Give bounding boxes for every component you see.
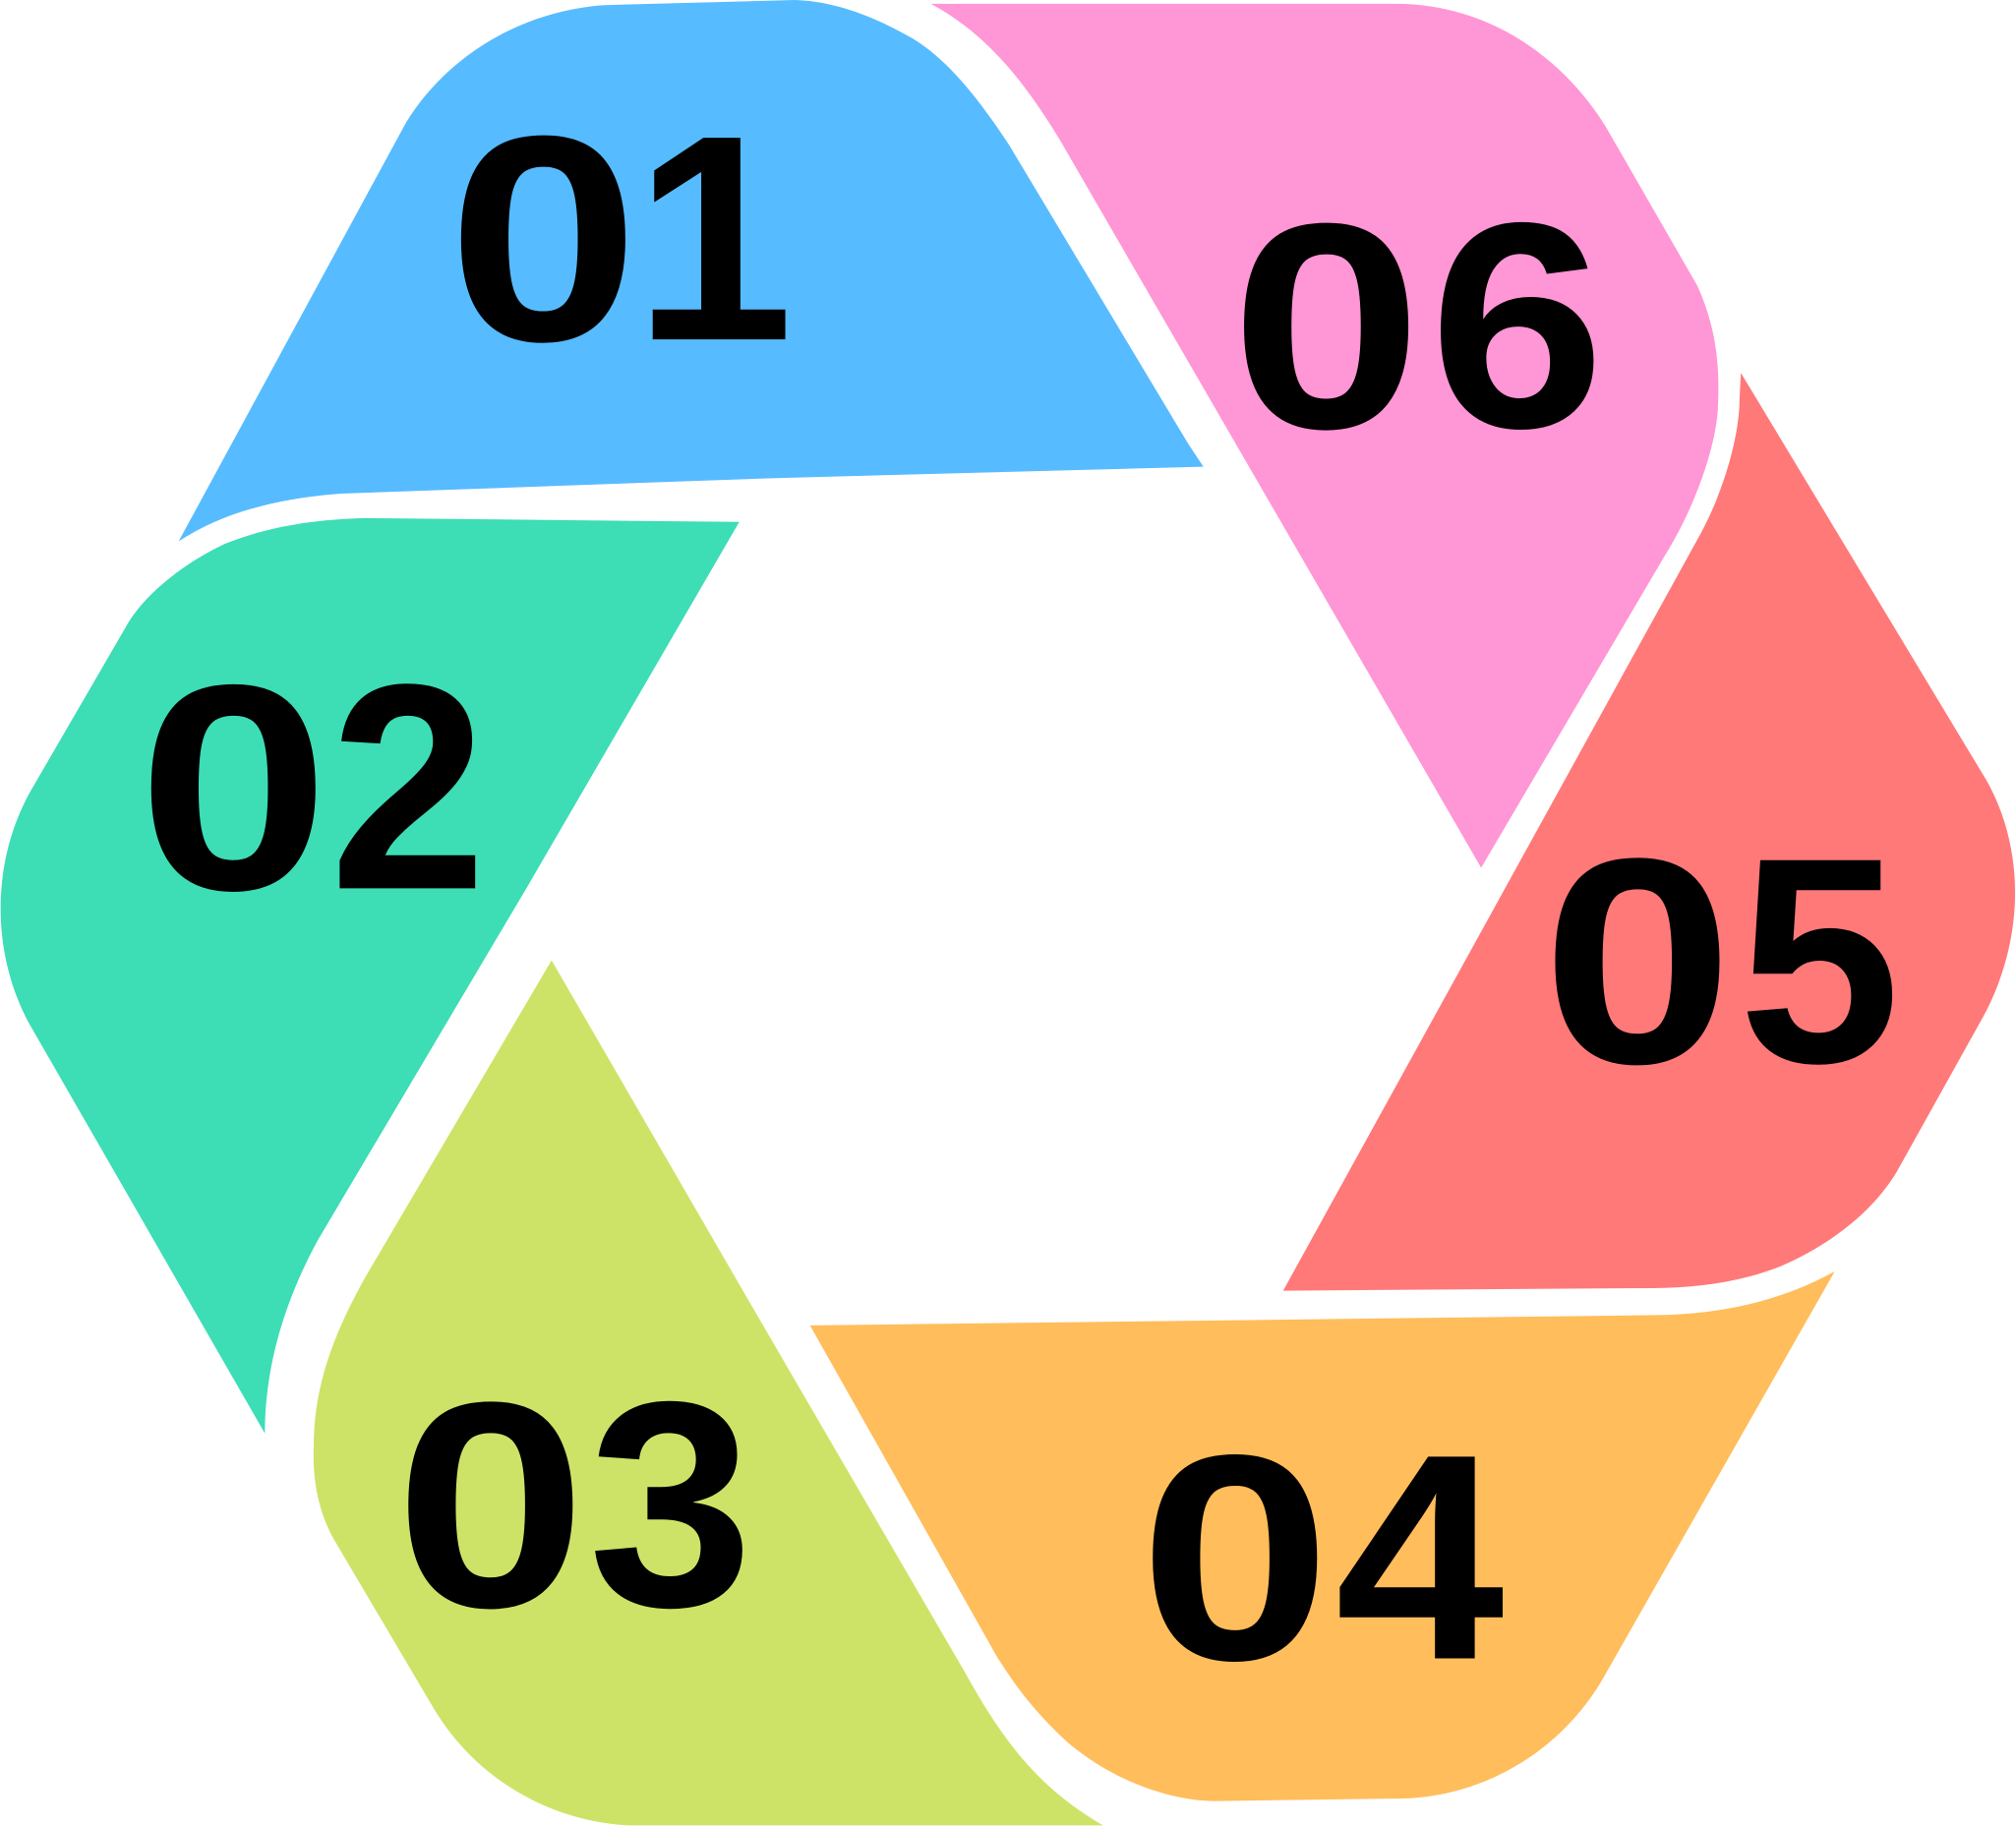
- green segment shape: [1, 518, 740, 1434]
- number 04: 4: [1335, 1394, 1507, 1721]
- number 05: 5: [1739, 796, 1900, 1124]
- number 03: 0: [394, 1341, 587, 1670]
- number 06: [1230, 161, 1605, 491]
- number 02: 2: [329, 623, 487, 951]
- number 05: [1542, 796, 1900, 1126]
- panel: segment 06: [931, 4, 1718, 867]
- panel: segment 04: [810, 1271, 1835, 1801]
- coral segment shape: [1283, 373, 2015, 1291]
- lime segment shape: [314, 961, 1103, 1825]
- orange segment shape: [810, 1271, 1835, 1801]
- number 01: [447, 75, 794, 403]
- pink segment shape: [931, 4, 1718, 867]
- number 05: 0: [1542, 797, 1734, 1126]
- panel: segment 01: [179, 0, 1204, 541]
- number 06: 6: [1429, 161, 1605, 490]
- number 03: [394, 1341, 753, 1670]
- number 04: [1139, 1394, 1507, 1722]
- number 04: 0: [1139, 1394, 1332, 1722]
- number 01: 0: [447, 76, 639, 403]
- number 02: 0: [138, 624, 329, 952]
- panel: segment 05: [1283, 373, 2015, 1291]
- panel: segment 02: [1, 518, 740, 1434]
- blue segment shape: [179, 0, 1204, 541]
- number 06: 0: [1230, 163, 1422, 491]
- number 03: 3: [588, 1341, 753, 1669]
- panel: segment 03: [314, 961, 1103, 1825]
- number 01: 1: [634, 75, 794, 402]
- number 02: [138, 623, 487, 952]
